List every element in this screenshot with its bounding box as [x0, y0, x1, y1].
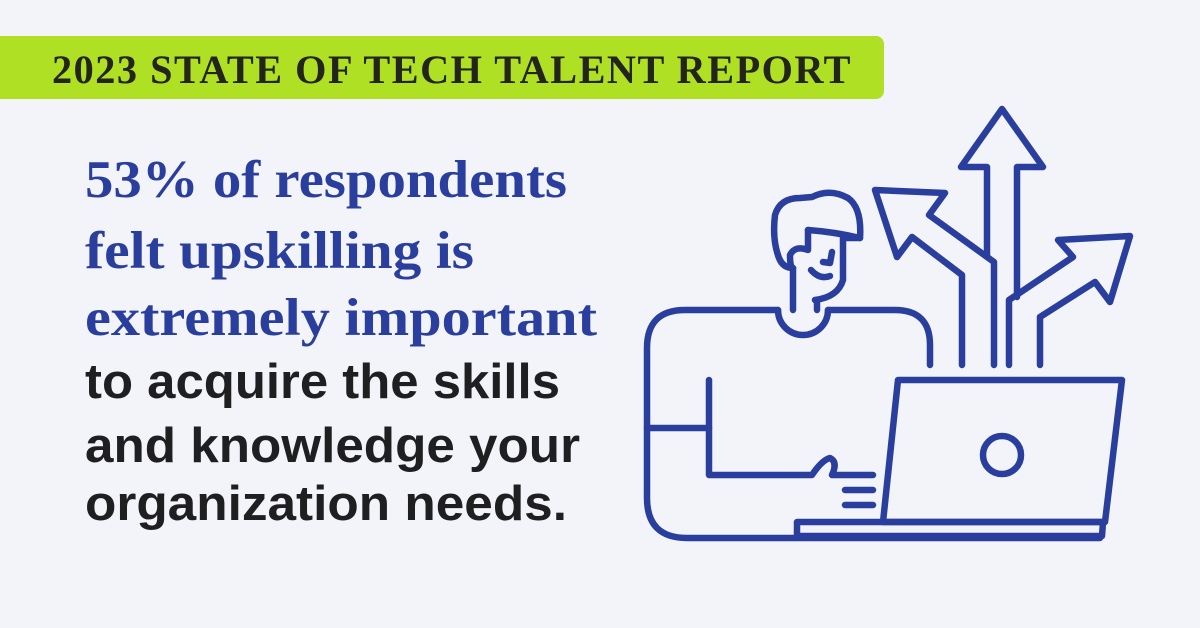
banner: report title: 2023 STATE OF TECH TALENT REPORT: [52, 47, 852, 92]
body text: continuation: organization needs.: [85, 477, 567, 531]
arrow: right: [1009, 236, 1130, 365]
head: [774, 193, 860, 310]
body text: continuation: and knowledge your: [85, 419, 580, 473]
body text: continuation: [85, 355, 580, 531]
laptop: [797, 380, 1122, 536]
arrow: left: [875, 190, 994, 365]
headline: blue statistic: 53% of respondents: [85, 151, 567, 209]
headline: blue statistic: [85, 151, 597, 347]
banner: report title: [0, 36, 884, 99]
headline: blue statistic: extremely important: [85, 289, 597, 347]
body text: continuation: to acquire the skills: [85, 355, 560, 409]
body outline: [647, 310, 1100, 538]
illustration: person at laptop with arrows: [647, 109, 1130, 538]
arrow: up: [961, 109, 1043, 297]
arm and hand: [647, 380, 873, 505]
headline: blue statistic: felt upskilling is: [85, 222, 474, 280]
